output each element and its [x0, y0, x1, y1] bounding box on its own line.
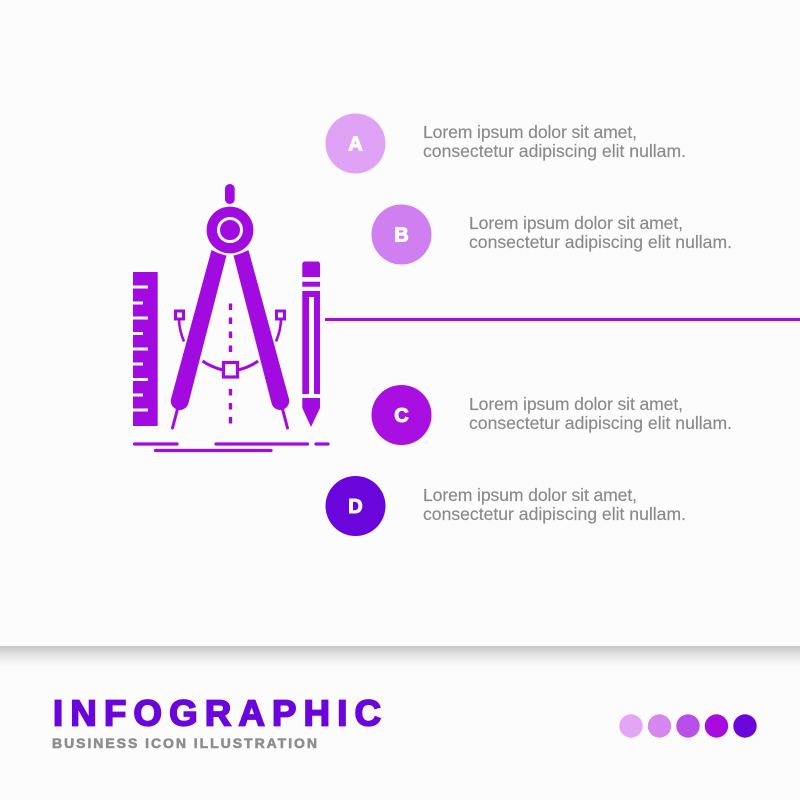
icon: engineering compass, ruler and pencil	[133, 184, 328, 450]
badge B	[372, 204, 432, 264]
pencil	[302, 262, 320, 427]
text D: Lorem ipsum dolor sit amet,	[423, 485, 637, 505]
text B: Lorem ipsum dolor sit amet,	[469, 213, 683, 233]
item C	[372, 385, 732, 445]
text A: consectetur adipiscing elit nullam.	[423, 141, 686, 161]
text B: consectetur adipiscing elit nullam.	[469, 232, 732, 252]
colour palette dots	[619, 714, 757, 738]
ground lines	[134, 444, 328, 450]
badge A: A	[348, 134, 363, 156]
item B	[372, 204, 732, 264]
footer shadow band	[0, 646, 800, 666]
text D: consectetur adipiscing elit nullam.	[423, 504, 686, 524]
badge D: D	[348, 496, 363, 518]
badge D	[326, 476, 386, 536]
badge B: B	[394, 224, 409, 246]
connector line	[325, 318, 800, 321]
item A	[326, 114, 686, 174]
left and right construction arcs	[176, 311, 284, 342]
badge C	[372, 385, 432, 445]
item D	[326, 476, 686, 536]
compass	[171, 184, 289, 428]
text C: Lorem ipsum dolor sit amet,	[469, 394, 683, 414]
ruler	[133, 272, 158, 426]
subtitle: BUSINESS ICON ILLUSTRATION	[52, 735, 317, 751]
compass centre guide	[202, 304, 258, 424]
text A: Lorem ipsum dolor sit amet,	[423, 122, 637, 142]
title: INFOGRAPHIC	[53, 692, 381, 734]
badge C: C	[394, 405, 409, 427]
badge A	[326, 114, 386, 174]
text C: consectetur adipiscing elit nullam.	[469, 413, 732, 433]
